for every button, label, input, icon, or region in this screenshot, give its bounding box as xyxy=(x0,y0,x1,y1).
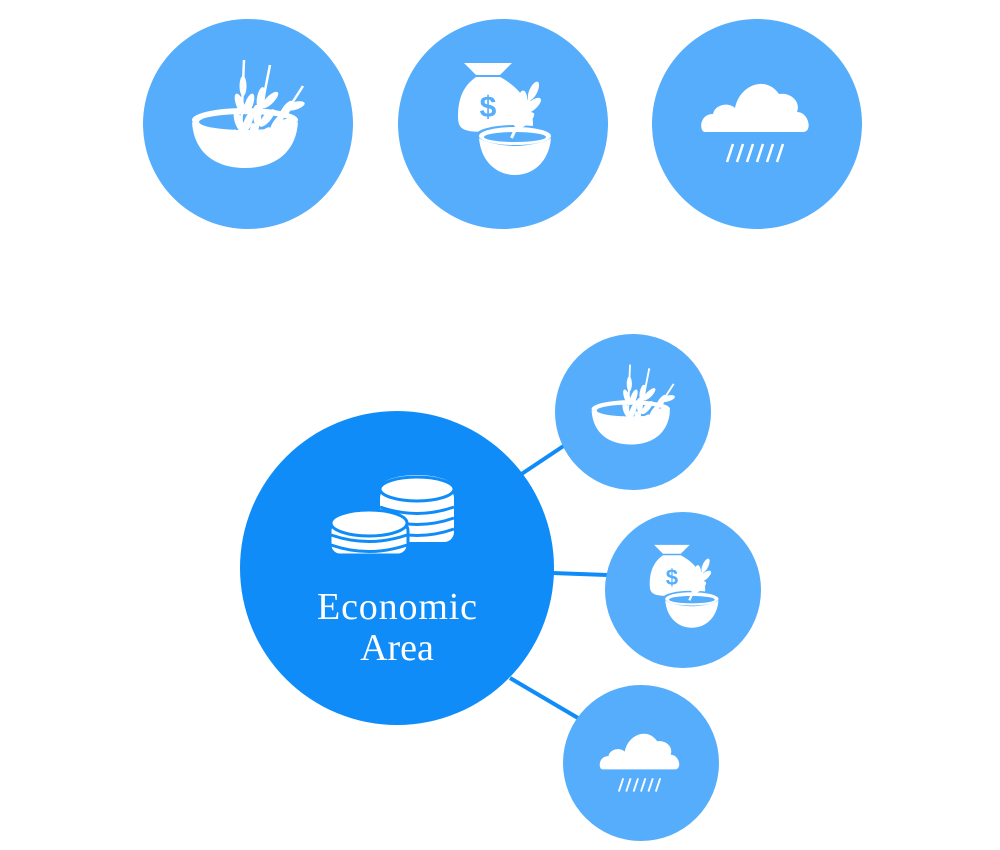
small circle: rain cloud xyxy=(563,685,719,841)
central circle: Economic Area xyxy=(240,411,554,725)
top circle: rain cloud xyxy=(652,19,862,229)
small circle: grain bowl xyxy=(555,334,711,490)
central circle: Economic Area: Area xyxy=(360,627,434,669)
connector lines xyxy=(510,445,607,718)
label text: Economic xyxy=(317,586,477,628)
top circle: grain bowl xyxy=(143,19,353,229)
top circle: money and grain xyxy=(398,19,608,229)
icon: coins xyxy=(330,475,454,555)
small circle: money and grain xyxy=(605,512,761,668)
